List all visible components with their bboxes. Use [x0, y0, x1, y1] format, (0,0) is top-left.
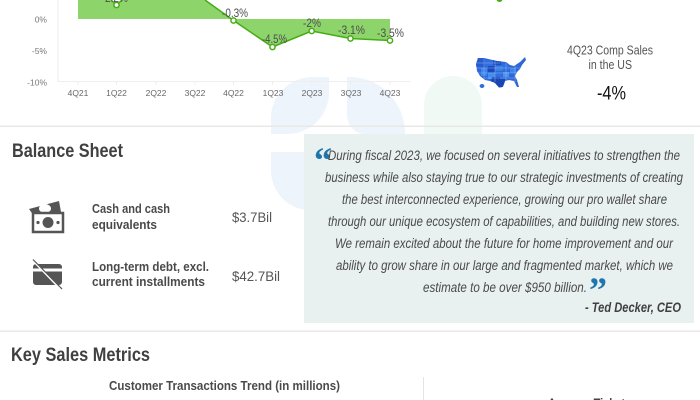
quote text: estimate to be over $950 billion. [423, 280, 587, 295]
trend line [111, 0, 390, 47]
label: Long-term debt, excl. [92, 259, 209, 274]
label [92, 259, 209, 289]
x axis labels: 3Q23 [341, 88, 362, 98]
stat label: in the US [588, 58, 632, 72]
label: current installments [92, 274, 205, 289]
icon: opening quote mark: “ [314, 140, 332, 180]
data labels [105, 0, 404, 46]
icon: crossed-out credit card [33, 260, 62, 290]
heading: Balance Sheet: Balance Sheet [12, 141, 124, 162]
value: $42.7Bil [232, 269, 280, 284]
y axis labels: -5% [32, 46, 47, 56]
green area [78, 0, 390, 47]
y axis labels: 0% [35, 14, 47, 24]
x axis labels: 3Q22 [185, 88, 206, 98]
data labels: -3.1% [338, 25, 365, 37]
x axis labels: 4Q21 [68, 88, 89, 98]
stat: 4Q23 comp sales in the US [567, 44, 653, 104]
icon: closing quote mark: ” [589, 270, 607, 310]
value: $3.7Bil [232, 210, 272, 225]
x axis labels: 2Q23 [302, 88, 323, 98]
label [92, 201, 170, 232]
x axis labels: 1Q22 [106, 88, 127, 98]
x axis labels: 2Q22 [146, 88, 167, 98]
section dividers [0, 126, 700, 400]
y axis labels: -10% [27, 78, 47, 88]
data labels: -3.5% [377, 28, 404, 40]
stat value: -4% [597, 84, 626, 104]
chart title: customer transactions trend: Customer Transactions Trend (in millions) [109, 378, 340, 393]
icon: cash [29, 201, 63, 232]
y axis labels [27, 14, 47, 88]
background watermark logo [271, 76, 482, 210]
chart top marker on right panel [496, 0, 502, 2]
label: Cash and cash [92, 201, 170, 216]
data labels: -0.3% [222, 8, 248, 20]
stat label: 4Q23 Comp Sales [567, 44, 653, 58]
chart axes [58, 0, 410, 85]
balance row: long-term debt [33, 259, 280, 290]
x axis labels: 4Q23 [380, 88, 401, 98]
data labels: -4.5% [262, 34, 287, 46]
label: equivalents [92, 217, 157, 232]
stat label [567, 44, 653, 72]
area chart: comp sales trend [27, 0, 410, 98]
data points [114, 2, 393, 50]
x axis labels: 4Q22 [223, 88, 244, 98]
x axis labels [68, 88, 401, 98]
panel: CEO quote [304, 134, 694, 323]
x axis labels: 1Q23 [263, 88, 284, 98]
icon: US map [476, 57, 526, 88]
heading: Key Sales Metrics: Key Sales Metrics [11, 345, 150, 366]
data labels: -2% [303, 18, 321, 30]
quote text [325, 148, 683, 295]
balance row: cash and cash equivalents [29, 201, 272, 232]
